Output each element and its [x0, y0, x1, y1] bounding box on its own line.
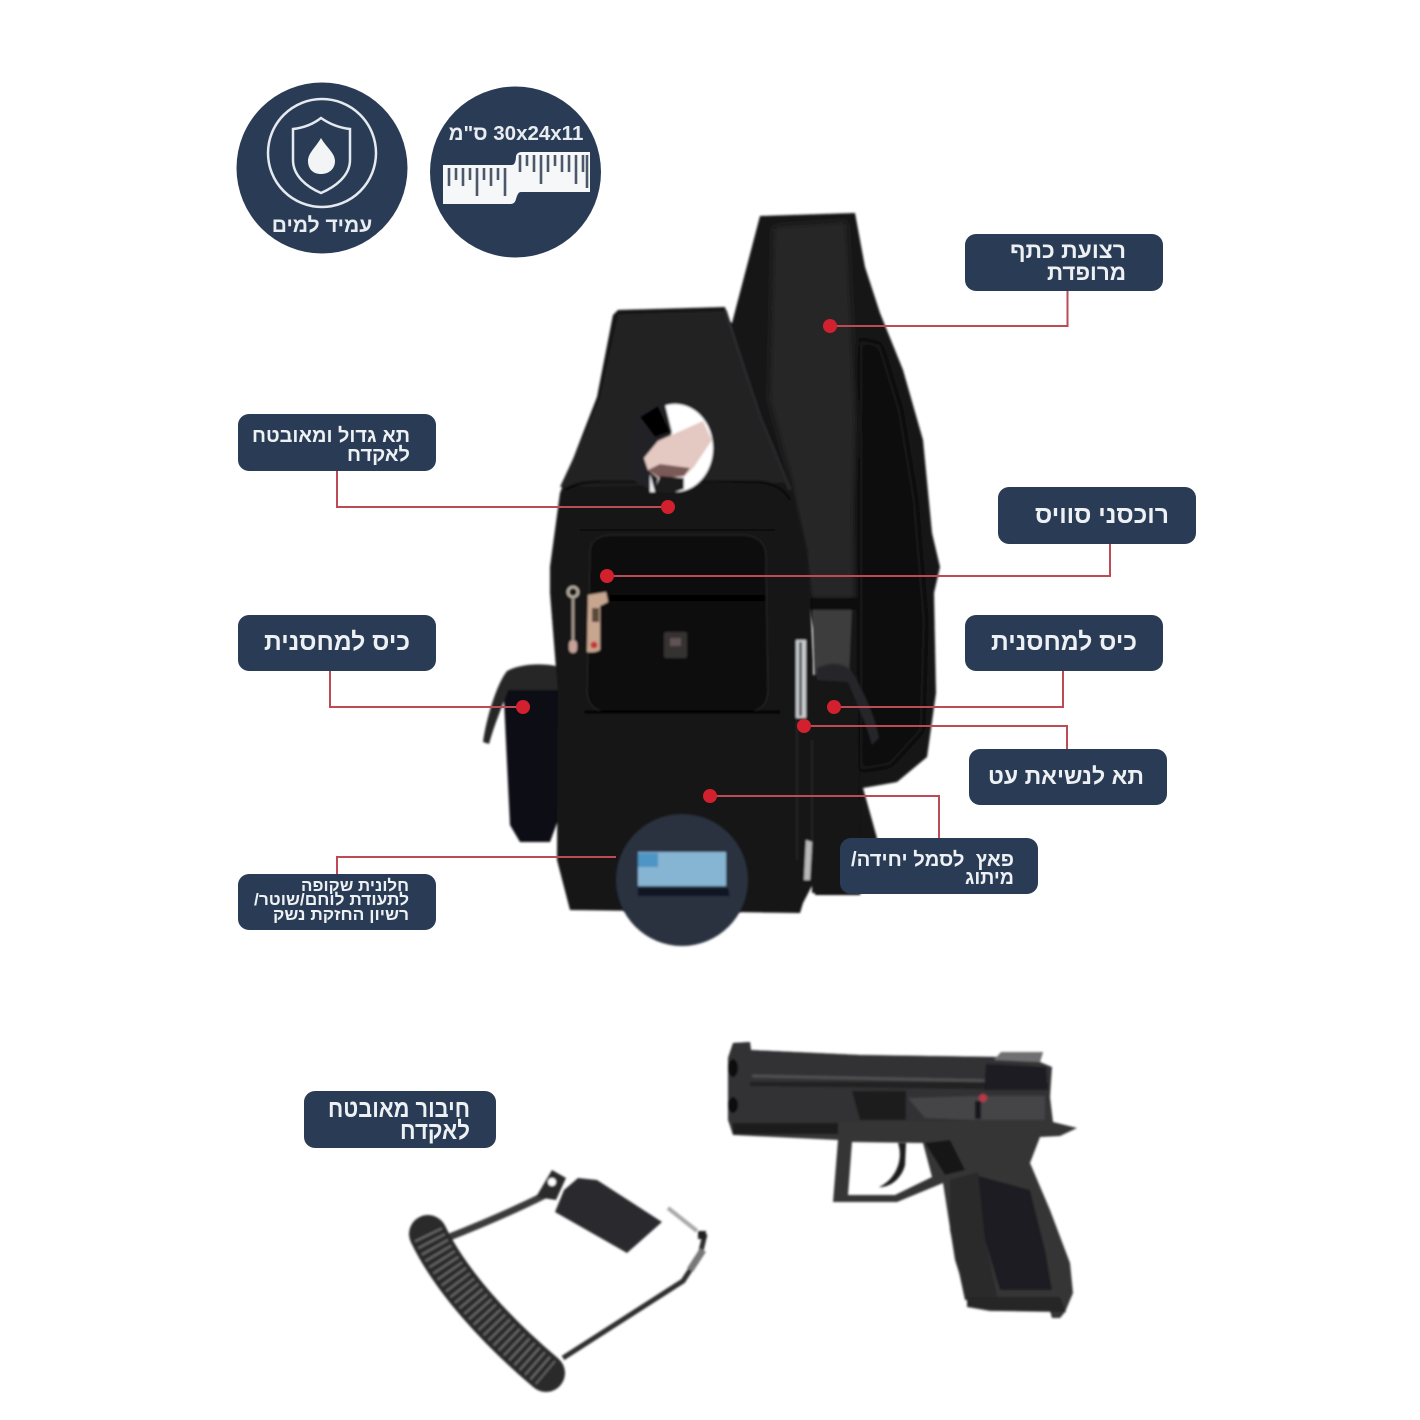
grip texture — [975, 1175, 1052, 1290]
badge: water resistant: עמיד למים — [272, 214, 372, 237]
inset: transparent card window — [616, 814, 748, 946]
label: secure connection to pistol: חיבור מאובטח — [328, 1095, 470, 1123]
muzzle — [728, 1059, 738, 1077]
line: left magazine pocket — [330, 671, 530, 714]
top pocket — [587, 535, 768, 712]
label: transparent window: לתעודת לוחם/שוטר/ — [254, 891, 409, 909]
badge: dimensions with measuring tape — [430, 86, 601, 258]
callout lines and dots — [330, 291, 1110, 874]
bag: rear view with padded shoulder strap — [728, 213, 940, 895]
magazine base — [967, 1297, 1066, 1312]
label: padded shoulder strap: מרופדת — [1047, 260, 1126, 285]
label: pen compartment — [969, 749, 1167, 805]
line: large compartment — [337, 471, 675, 514]
front rail — [733, 1123, 838, 1134]
label: padded shoulder strap — [965, 234, 1163, 291]
cord to patch — [447, 1178, 553, 1238]
trigger — [879, 1143, 906, 1187]
coil — [428, 1234, 546, 1373]
bag: front body — [483, 307, 879, 913]
line: padded strap — [823, 291, 1068, 333]
label: left magazine pocket — [238, 615, 436, 671]
black patch — [555, 1178, 662, 1253]
coiled pistol lanyard — [428, 1170, 706, 1373]
badge: dimensions with measuring tape: 30x24x11 ס"מ — [449, 122, 583, 145]
label: right magazine pocket — [965, 615, 1163, 671]
rear sight — [994, 1052, 1043, 1062]
zipper pull: ring — [568, 587, 578, 653]
label: secure connection to pistol — [304, 1091, 496, 1148]
label: right magazine pocket: כיס למחסנית — [991, 628, 1137, 656]
lever — [908, 1096, 1045, 1120]
label: pen compartment: תא לנשיאת עט — [988, 763, 1144, 789]
cord to clip — [563, 1234, 705, 1358]
line: swiss zippers — [600, 544, 1110, 583]
label: large secure pistol compartment: לאקדח — [347, 444, 410, 466]
left side pocket — [483, 664, 566, 842]
line: right magazine pocket — [827, 671, 1063, 714]
patch logo — [664, 632, 687, 658]
label: swiss zippers: רוכסני סוויס — [1035, 501, 1169, 529]
line: patch — [703, 789, 939, 838]
hole in bag showing hand reaching for pistol — [632, 404, 713, 493]
label: left magazine pocket: כיס למחסנית — [264, 628, 410, 656]
label: unit patch: פאץ לסמל יחידה/ — [851, 849, 1014, 871]
lower pocket — [593, 716, 785, 815]
label: padded shoulder strap: רצועת כתף — [1010, 238, 1126, 263]
right side pocket — [812, 664, 879, 893]
line: pen compartment — [797, 719, 1067, 749]
line: card window — [337, 857, 616, 874]
label: swiss zippers — [998, 487, 1196, 544]
label: secure connection to pistol: לאקדח — [400, 1117, 470, 1145]
label: transparent window: חלונית שקופה — [301, 877, 409, 895]
badge: water resistant — [236, 82, 408, 254]
pistol — [728, 1042, 1077, 1318]
label: transparent window — [238, 874, 436, 930]
slide — [728, 1042, 1050, 1125]
pen — [796, 640, 812, 880]
label: unit patch: מיתוג — [965, 867, 1014, 889]
label: large secure pistol compartment — [238, 414, 436, 471]
slide serrations — [852, 1091, 906, 1120]
label: transparent window: רשיון החזקת נשק — [273, 906, 409, 924]
label: large secure pistol compartment: תא גדול ומאובטח — [252, 425, 410, 447]
label: unit patch — [840, 838, 1038, 894]
zipper pull: flat — [587, 592, 608, 652]
